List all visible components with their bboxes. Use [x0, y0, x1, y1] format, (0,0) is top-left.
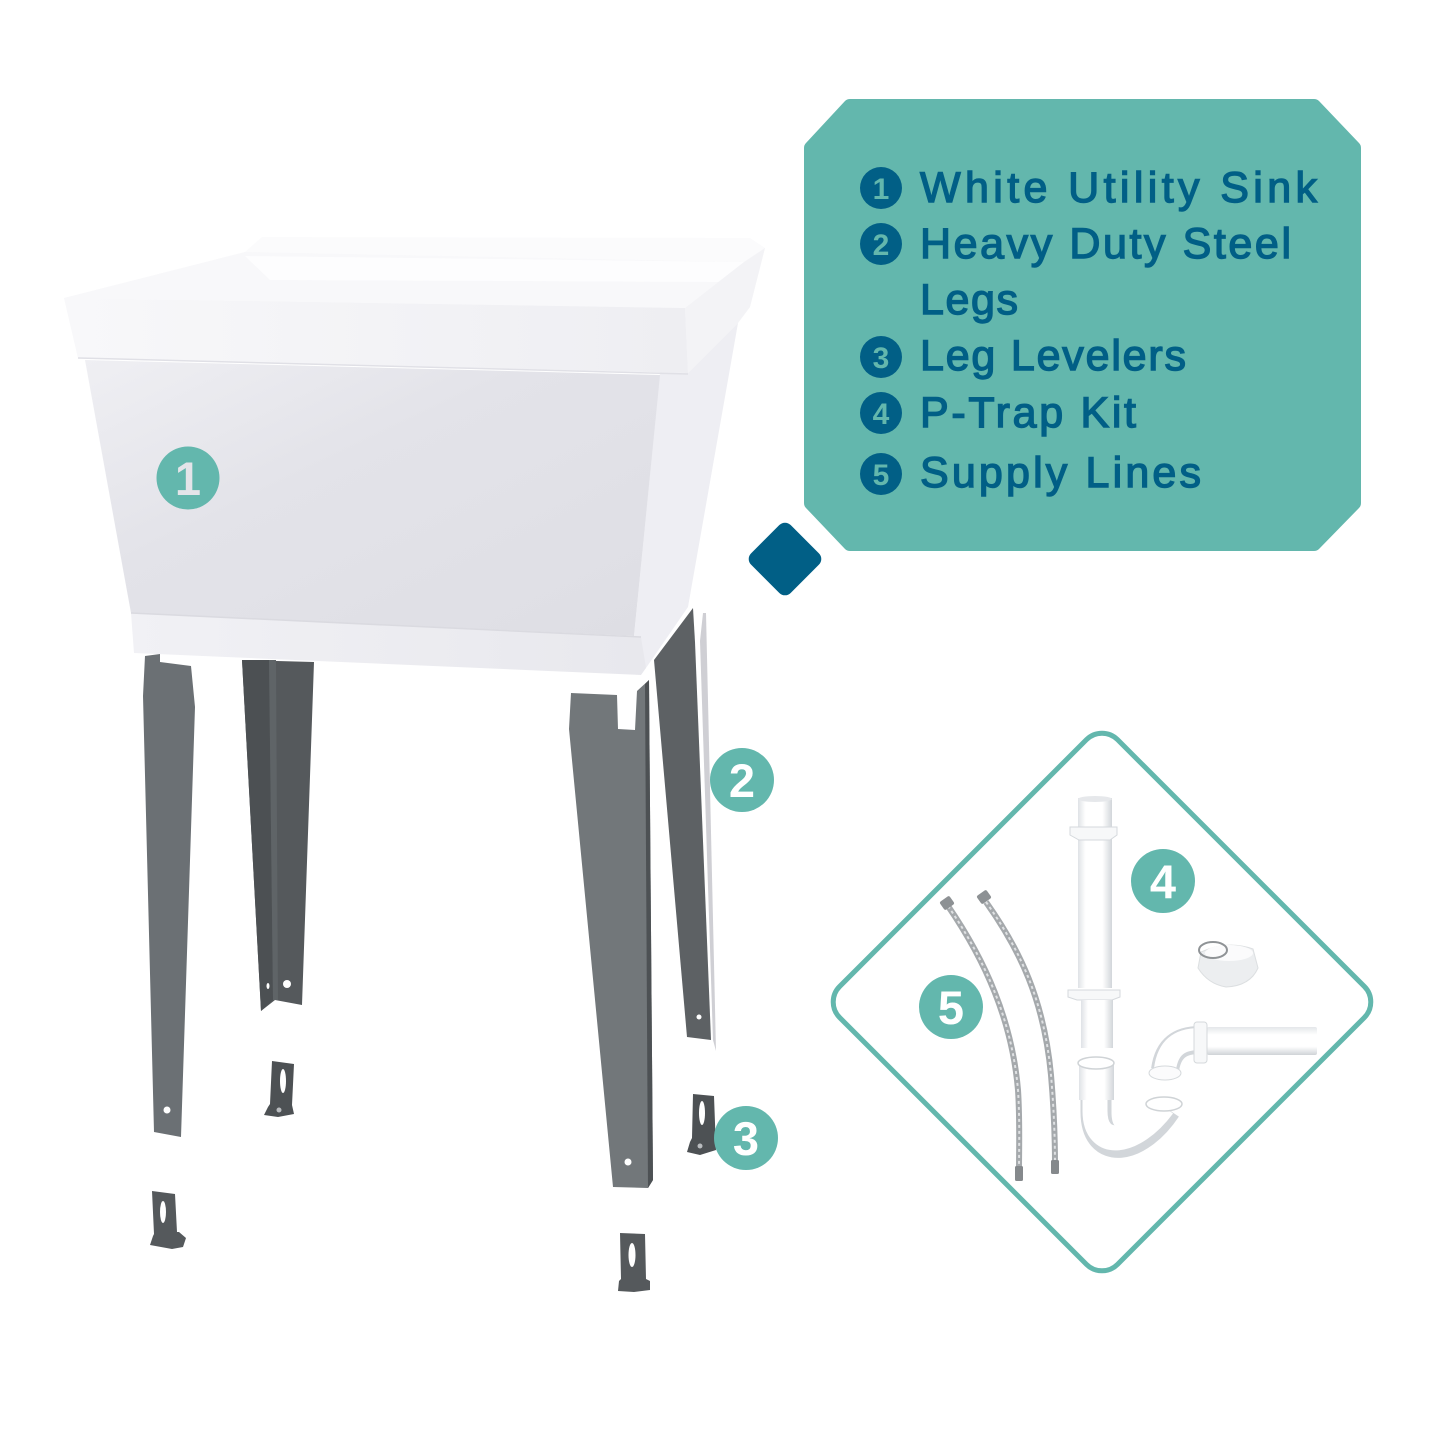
list item 1: 1: [873, 173, 889, 206]
navy diamond accent: [745, 519, 825, 599]
sink tub: [64, 237, 765, 675]
list item 3: 3: [873, 342, 889, 375]
leg: back right: [654, 608, 716, 1051]
badge 3: 3: [733, 1112, 759, 1165]
rubber stopper: [1198, 942, 1258, 987]
list item 2: [860, 220, 1291, 324]
list item 5: 5: [873, 459, 889, 492]
list item 4: 4: [873, 398, 890, 431]
list item 2: 2: [873, 229, 889, 262]
badge 2: [710, 748, 774, 812]
p-trap: j-bend: [1078, 1057, 1182, 1142]
front rim: [64, 298, 688, 373]
leg: front left: [143, 654, 195, 1137]
front body: [85, 360, 660, 636]
callout panel: parts list: [804, 99, 1361, 551]
leveler: back left: [264, 1061, 294, 1117]
bottom band: [131, 613, 646, 675]
list item 3: Leg Levelers: [920, 332, 1186, 380]
right side face: [685, 248, 765, 373]
back rim and interior: [64, 237, 765, 373]
supply lines: [939, 889, 1059, 1181]
badge 1: 1: [175, 452, 201, 505]
badge 1: [156, 446, 220, 510]
list item 5: Supply Lines: [920, 449, 1201, 497]
badge 5: [919, 975, 983, 1039]
diamond frame: accessories: [824, 724, 1380, 1280]
list item 2: Heavy Duty Steel: [920, 220, 1291, 268]
leveler: front right: [618, 1233, 650, 1292]
list item 1: White Utility Sink: [920, 164, 1318, 212]
badge 2: 2: [729, 754, 755, 807]
badge 5: 5: [938, 981, 964, 1034]
list item 4: P-Trap Kit: [920, 389, 1136, 437]
leg: back left: [242, 660, 314, 1011]
badge 3: [714, 1106, 778, 1170]
leveler: front left: [150, 1191, 186, 1249]
p-trap: tailpiece tube: [1068, 796, 1120, 1048]
leveler: back right: [687, 1094, 716, 1155]
leg: front right: [569, 680, 653, 1188]
p-trap: elbow and outlet: [1149, 1022, 1317, 1080]
badge 4: 4: [1150, 855, 1176, 908]
list item 2: Legs: [920, 276, 1018, 324]
badge 4: [1131, 849, 1195, 913]
